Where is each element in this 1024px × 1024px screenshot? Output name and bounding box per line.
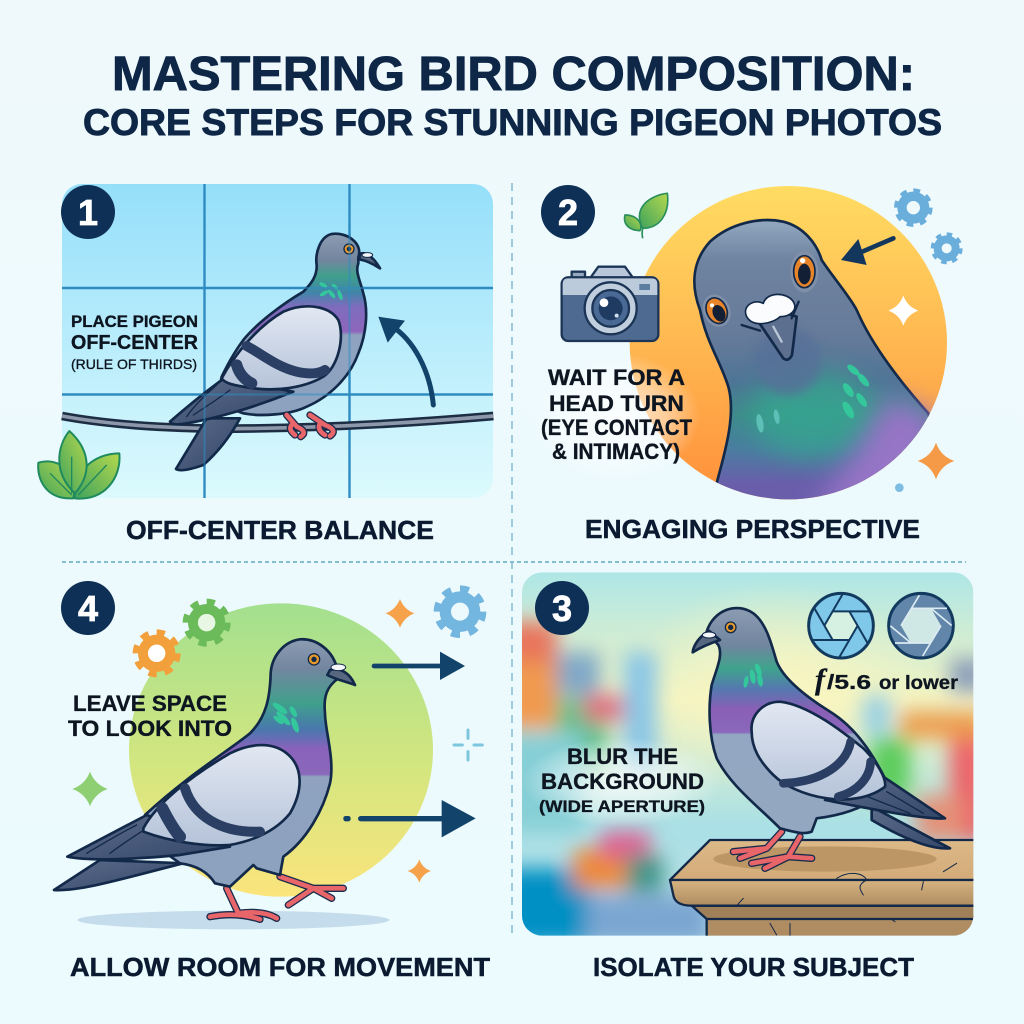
- aperture value label: or lower: [879, 673, 959, 694]
- panel 2 label: WAIT FOR A: [548, 365, 685, 390]
- icon: sparkles: [72, 599, 482, 883]
- badge 4: 4: [78, 588, 98, 629]
- blurred city background: [503, 572, 987, 945]
- panel 2 label: & INTIMACY): [552, 439, 680, 464]
- panel 3 label: BLUR THE: [567, 744, 678, 769]
- pigeon 3: [693, 608, 950, 868]
- label haze: [528, 740, 709, 822]
- panel 2 label: (EYE CONTACT: [541, 415, 693, 440]
- badge 2: 2: [558, 192, 578, 233]
- curved arrow: [378, 317, 433, 405]
- icon: sparkles: [888, 296, 954, 492]
- neck feathers: [319, 281, 344, 301]
- title: [83, 48, 942, 143]
- pigeon close-up: [694, 220, 953, 510]
- icon: sprout: [625, 193, 668, 238]
- arrow to eye: [841, 238, 893, 265]
- title: CORE STEPS FOR STUNNING PIGEON PHOTOS: [83, 102, 942, 143]
- iridescent feathers: [755, 363, 871, 433]
- panel 2 label: HEAD TURN: [549, 391, 684, 416]
- icon: gears: [897, 191, 960, 262]
- icon: narrow aperture: [889, 593, 953, 658]
- badge 1: 1: [78, 192, 98, 233]
- badge 1: [61, 185, 115, 239]
- pigeon 1: [170, 234, 380, 470]
- pigeon 4: [54, 639, 355, 919]
- stone ledge: [670, 840, 980, 940]
- aperture value label: [815, 663, 959, 696]
- icon: camera: [562, 267, 658, 341]
- panel 3 label: [539, 744, 705, 816]
- caption 2: ENGAGING PERSPECTIVE: [585, 514, 920, 544]
- panel 4 label: [68, 691, 232, 741]
- panel 4 label: TO LOOK INTO: [68, 716, 232, 741]
- panel 1 label: PLACE PIGEON: [71, 312, 198, 331]
- icon: blue gear: [437, 589, 483, 634]
- badge 4: [61, 581, 115, 635]
- panel 1 label: OFF-CENTER: [71, 332, 199, 354]
- grid overlay on pigeon: [190, 230, 370, 498]
- ground shadow: [77, 911, 389, 929]
- panel 4: allow room for movement: [54, 581, 490, 982]
- panel 2: engaging perspective: [533, 185, 960, 544]
- panel 1 background: [62, 184, 493, 498]
- badge 3: [535, 581, 589, 635]
- gradient circle: [630, 186, 947, 499]
- aperture value label: f: [815, 663, 828, 696]
- pigeon eyes and beak: [698, 251, 818, 360]
- rule of thirds grid: [62, 184, 493, 498]
- panel 3: isolate your subject: [503, 572, 987, 982]
- panel 2 label: [541, 365, 693, 464]
- icon: orange gear: [136, 633, 177, 674]
- panel 3 label: BACKGROUND: [541, 769, 704, 794]
- panel 3 label: (WIDE APERTURE): [539, 797, 705, 816]
- panel 4 label: LEAVE SPACE: [73, 691, 227, 716]
- text haze: [533, 353, 700, 480]
- caption 1: OFF-CENTER BALANCE: [126, 515, 434, 545]
- panel 1: off-center balance: [38, 184, 493, 545]
- icon: wide aperture: [809, 593, 873, 658]
- gradient circle: [129, 603, 433, 897]
- title: MASTERING BIRD COMPOSITION:: [112, 48, 915, 101]
- direction arrows: [343, 652, 476, 837]
- caption 3: ISOLATE YOUR SUBJECT: [593, 952, 914, 982]
- aperture value label: /5.6: [827, 672, 871, 694]
- wire: [62, 416, 493, 429]
- panel 1 label: (RULE OF THIRDS): [71, 356, 197, 372]
- icon: plant leaves: [38, 431, 120, 499]
- badge 2: [541, 185, 595, 239]
- panel 1 label: [71, 312, 199, 372]
- badge 3: 3: [552, 588, 572, 629]
- icon: green gear: [186, 602, 227, 643]
- pigeon on wire scene: [38, 234, 493, 499]
- caption 4: ALLOW ROOM FOR MOVEMENT: [70, 952, 490, 982]
